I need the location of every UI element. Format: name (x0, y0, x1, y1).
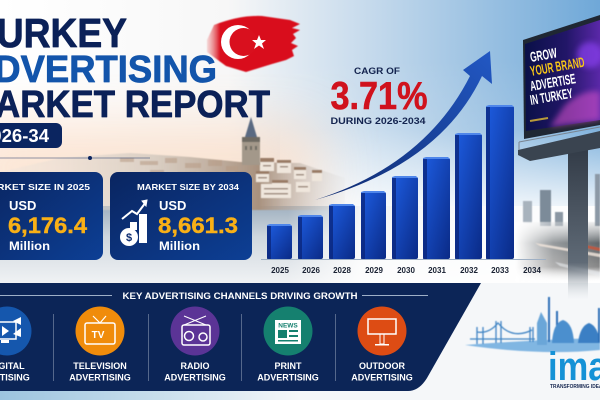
axis labels (271, 266, 541, 275)
panel: advertising channels (0, 283, 481, 391)
icon: television (76, 306, 124, 356)
billboard platform (518, 131, 600, 161)
year pill (0, 123, 62, 148)
city skyline on the left (0, 153, 345, 210)
axis labels: 2032 (460, 266, 478, 275)
axis labels: 2030 (397, 266, 415, 275)
icon: print (264, 306, 312, 356)
card: market size 2025: Million (9, 239, 50, 253)
card: market size 2034: USD (159, 198, 186, 213)
axis labels: 2034 (523, 266, 541, 275)
axis labels: 2025 (271, 266, 289, 275)
CAGR callout: CAGR OF (354, 66, 400, 77)
card: market size 2034: MARKET SIZE BY 2034 (137, 182, 239, 192)
CAGR callout: 3.71% (330, 75, 428, 118)
billboard frame (523, 15, 600, 139)
icon: print: NEWS (278, 322, 298, 330)
billboard text (529, 44, 586, 108)
label: radio: RADIO (180, 361, 210, 371)
axis labels: 2028 (333, 266, 351, 275)
watercolor Istanbul skyline (465, 297, 600, 352)
label: outdoor: ADVERTISING (351, 372, 413, 382)
icon: radio (170, 306, 220, 356)
card: market size 2034 (110, 172, 252, 260)
icon: Galata tower (242, 117, 260, 165)
title (0, 10, 270, 126)
icon: digital (0, 306, 32, 356)
billboard (518, 15, 600, 300)
axis labels: 2033 (491, 266, 509, 275)
label: print: ADVERTISING (257, 372, 319, 382)
icon: money growth: $ (126, 232, 132, 244)
label: outdoor: OUTDOOR (359, 361, 405, 371)
card: market size 2025: USD (9, 198, 36, 213)
axis labels: 2031 (428, 266, 446, 275)
bar chart (261, 51, 546, 275)
flag of Turkey (207, 16, 300, 72)
timeline rule (0, 156, 150, 160)
billboard screen (525, 20, 600, 131)
card: market size 2034: 8,661.3 (158, 213, 238, 238)
card: market size 2025 (0, 172, 103, 260)
CAGR callout: DURING 2026-2034 (330, 116, 426, 126)
card: market size 2025: 6,176.4 (8, 213, 88, 238)
axis labels: 2026 (302, 266, 320, 275)
CAGR callout (330, 66, 428, 126)
icon: television: TV (92, 330, 105, 341)
icon: money growth (120, 200, 147, 246)
card: market size 2034: Million (159, 239, 200, 253)
label: radio: ADVERTISING (164, 372, 226, 382)
growth arrow (315, 51, 492, 200)
axis labels: 2029 (365, 266, 383, 275)
icon: outdoor billboard (358, 306, 406, 356)
label: print: PRINT (274, 361, 302, 371)
label: television: ADVERTISING (69, 372, 131, 382)
label: television: TELEVISION (73, 361, 127, 371)
billboard text: GROW (529, 44, 559, 65)
panel heading: KEY ADVERTISING CHANNELS DRIVING GROWTH (122, 291, 358, 302)
city skyline on the right with road (515, 174, 600, 282)
billboard pole (568, 150, 588, 300)
